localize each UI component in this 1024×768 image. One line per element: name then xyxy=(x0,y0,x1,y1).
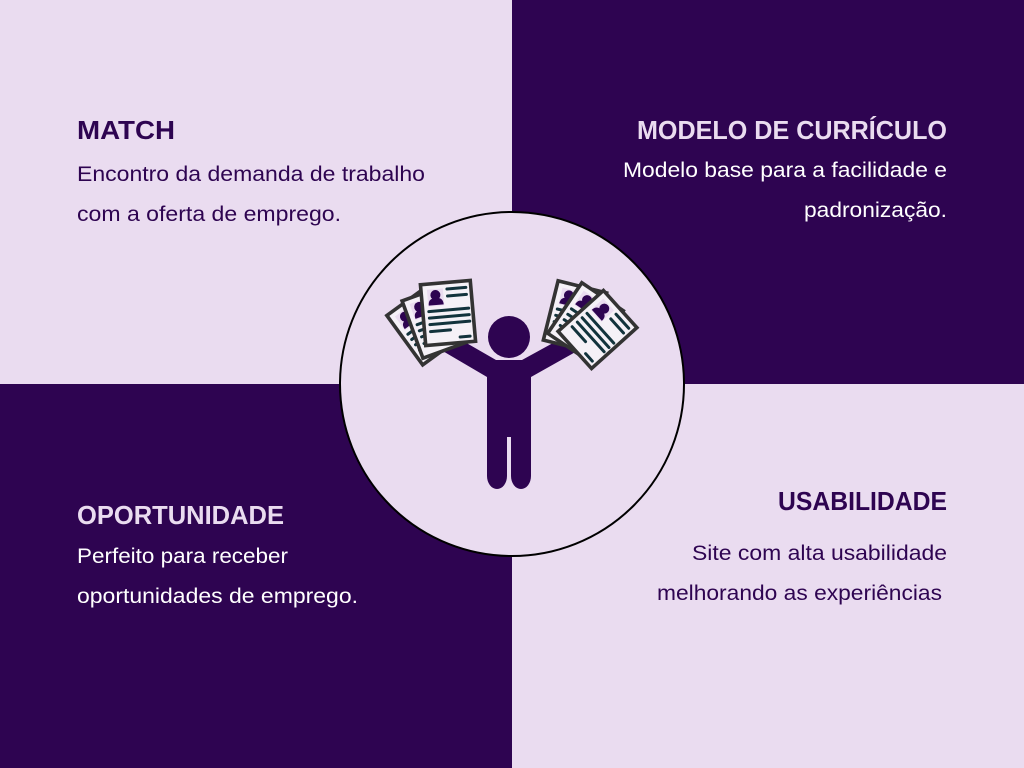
heading: match: MATCH xyxy=(77,115,175,145)
body: usabilidade line 2: melhorando as experiências xyxy=(657,582,942,605)
text block: modelo de currículo xyxy=(623,115,947,222)
icon: person holding resumes xyxy=(387,280,637,489)
panel: usabilidade background xyxy=(512,384,1024,768)
body: modelo line 2: padronização. xyxy=(804,199,947,222)
body: match line 1: Encontro da demanda de trabalho xyxy=(77,163,425,186)
body: oportunidade line 2: oportunidades de emprego. xyxy=(77,585,358,608)
panel: modelo de currículo background xyxy=(512,0,1024,384)
heading: usabilidade: USABILIDADE xyxy=(778,486,947,516)
body: match line 2: com a oferta de emprego. xyxy=(77,203,341,226)
icon: resumes right hand xyxy=(543,281,637,368)
icon: resumes left hand xyxy=(387,280,476,365)
icon: person xyxy=(441,316,579,489)
body: oportunidade line 1: Perfeito para receber xyxy=(77,545,288,568)
body: modelo line 1: Modelo base para a facilidade e xyxy=(623,159,947,182)
panel: match background xyxy=(0,0,512,384)
text block: usabilidade xyxy=(657,486,947,605)
center circle xyxy=(340,212,684,556)
text block: match xyxy=(77,115,425,226)
heading: modelo de currículo: MODELO DE CURRÍCULO xyxy=(637,115,947,145)
panel: oportunidade background xyxy=(0,384,512,768)
text block: oportunidade xyxy=(77,500,358,608)
heading: oportunidade: OPORTUNIDADE xyxy=(77,500,284,530)
body: usabilidade line 1: Site com alta usabilidade xyxy=(692,542,947,565)
